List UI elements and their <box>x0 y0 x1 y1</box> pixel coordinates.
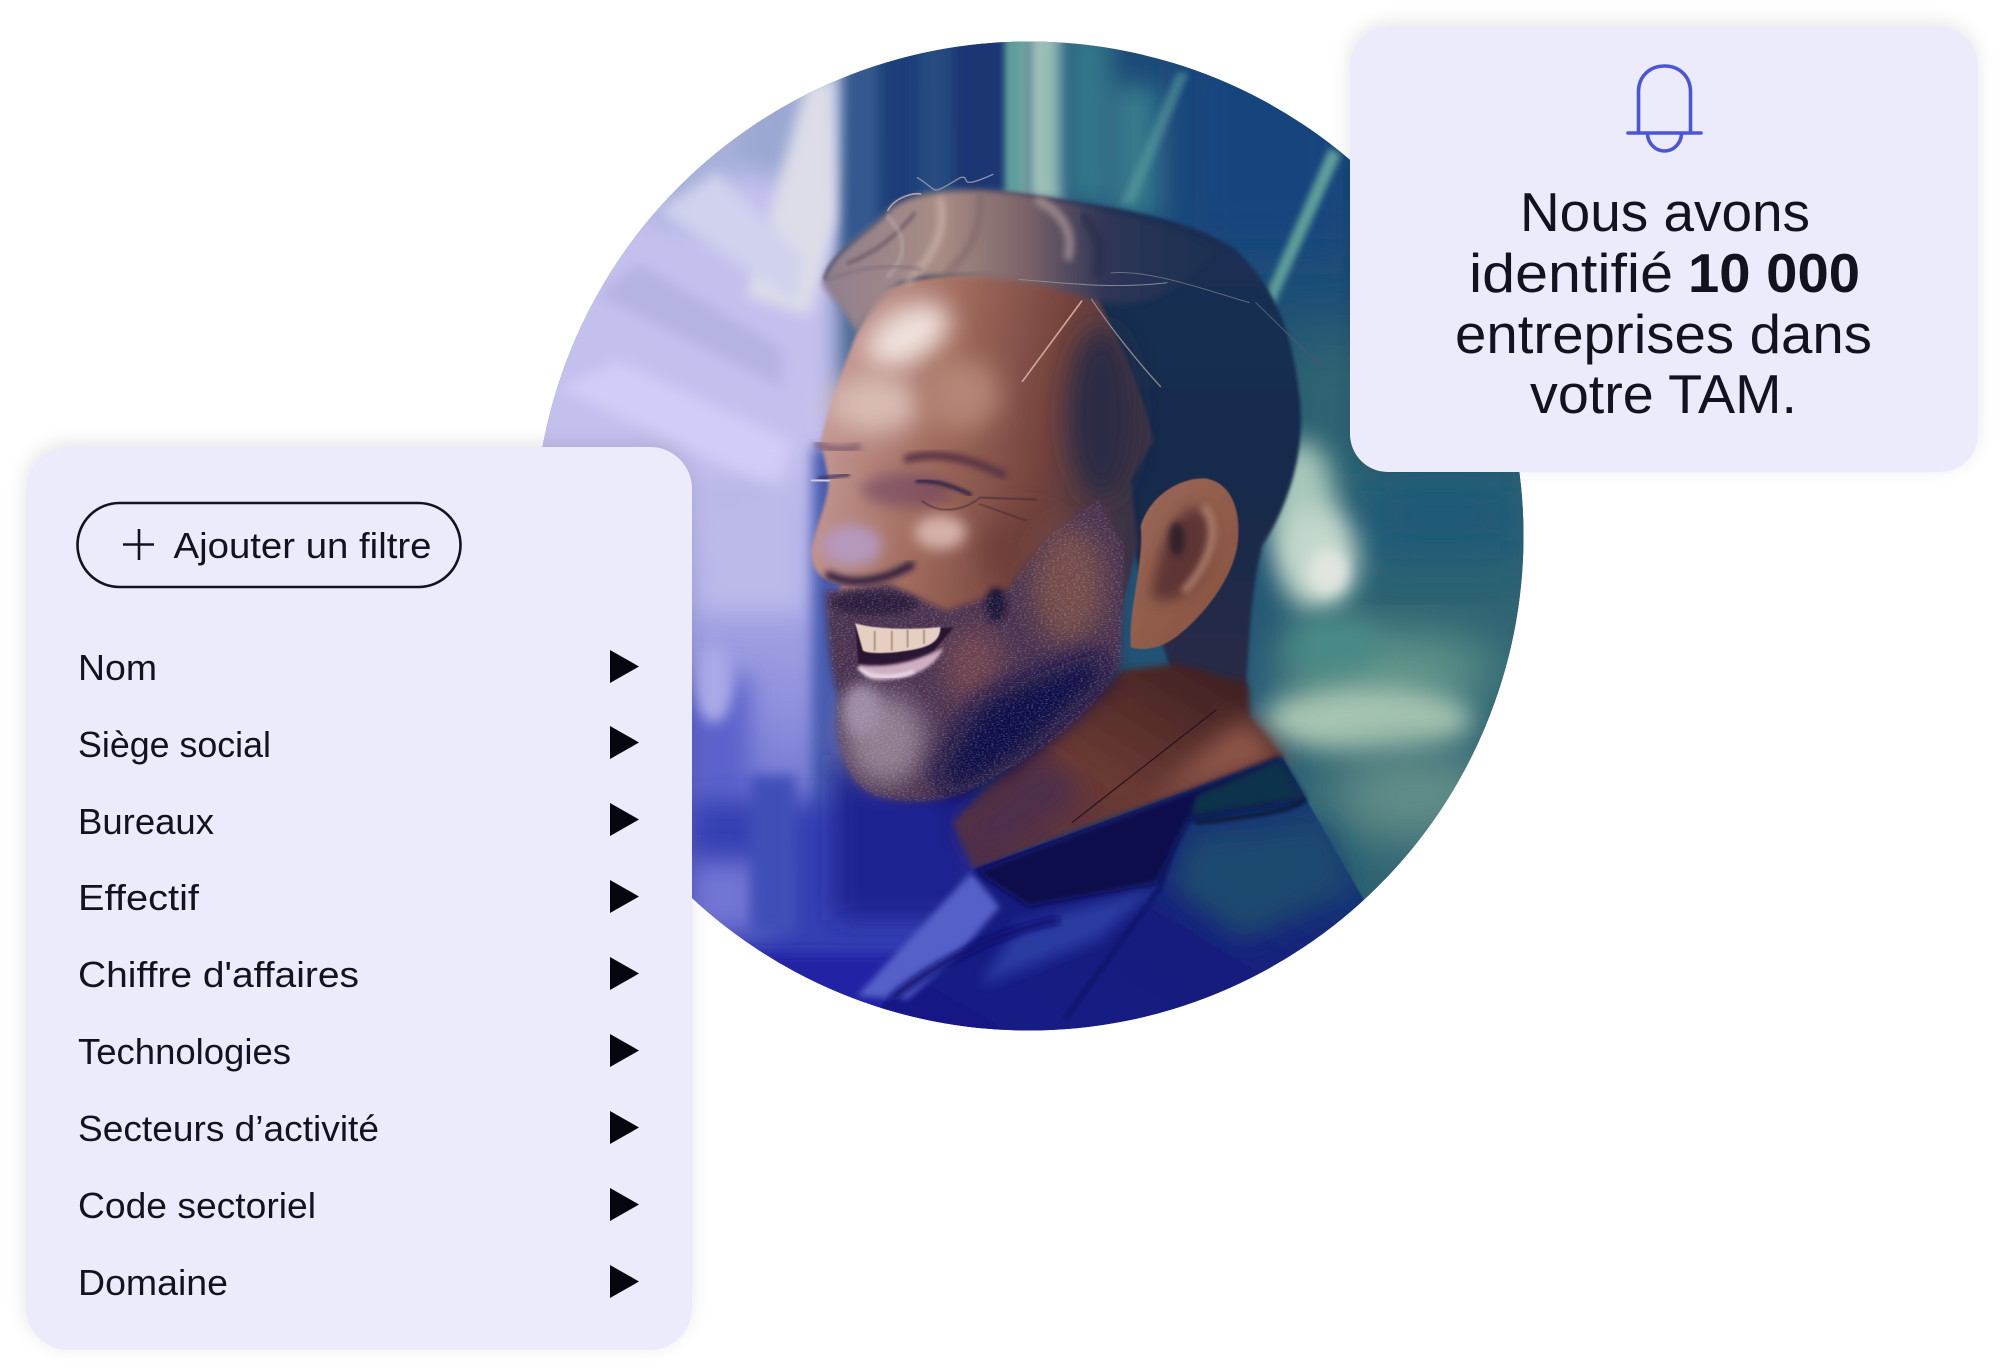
brows and eyes <box>812 444 1036 581</box>
button: add filter: Ajouter un filtre <box>174 525 432 566</box>
right side foliage <box>1278 330 1524 960</box>
row: Nom <box>78 647 639 688</box>
row: Secteurs d'activité: Secteurs d’activité <box>78 1108 379 1149</box>
shirt <box>880 756 1364 1030</box>
row: Bureaux <box>78 801 639 842</box>
card: TAM notification <box>1350 27 1978 472</box>
man: hair back <box>823 191 1301 690</box>
text: TAM message: identifié <box>1469 242 1673 304</box>
text: TAM message: entreprises dans <box>1455 303 1872 365</box>
row: Secteurs d'activité <box>78 1108 639 1149</box>
beard <box>822 493 1131 808</box>
row: Chiffre d'affaires: Chiffre d'affaires <box>78 954 359 995</box>
hair front <box>822 190 1216 334</box>
row: Chiffre d'affaires <box>78 954 639 995</box>
panel: filter list <box>26 447 692 1350</box>
row: Siège social <box>78 724 639 765</box>
row: Bureaux: Bureaux <box>78 801 214 842</box>
face <box>809 274 1154 615</box>
icon: bell <box>1628 66 1701 151</box>
text: TAM message: Nous avons <box>1520 181 1810 243</box>
row: Effectif: Effectif <box>78 877 200 918</box>
mouth and teeth <box>855 623 954 680</box>
text: TAM message: 10 000 <box>1688 242 1860 304</box>
blurred background <box>542 42 1524 1030</box>
row: Nom: Nom <box>78 647 157 688</box>
row: Code sectoriel: Code sectoriel <box>78 1185 316 1226</box>
dark vertical stripes top <box>845 27 881 302</box>
row: Domaine: Domaine <box>78 1262 228 1303</box>
lower blue stripes <box>691 802 980 1064</box>
row: Technologies <box>78 1031 639 1072</box>
portrait photo in circle <box>542 42 1524 1030</box>
button: add filter <box>78 503 460 587</box>
row: Code sectoriel <box>78 1185 639 1226</box>
row: Technologies: Technologies <box>78 1031 291 1072</box>
row: Domaine <box>78 1262 639 1303</box>
ear <box>1130 478 1238 649</box>
text: TAM message <box>1455 181 1872 425</box>
neck <box>954 664 1285 871</box>
panel background <box>26 447 692 1350</box>
row: Siège social: Siège social <box>78 724 271 765</box>
row: Effectif <box>78 877 639 918</box>
card background <box>1350 27 1978 472</box>
text: TAM message: votre TAM. <box>1530 363 1797 425</box>
